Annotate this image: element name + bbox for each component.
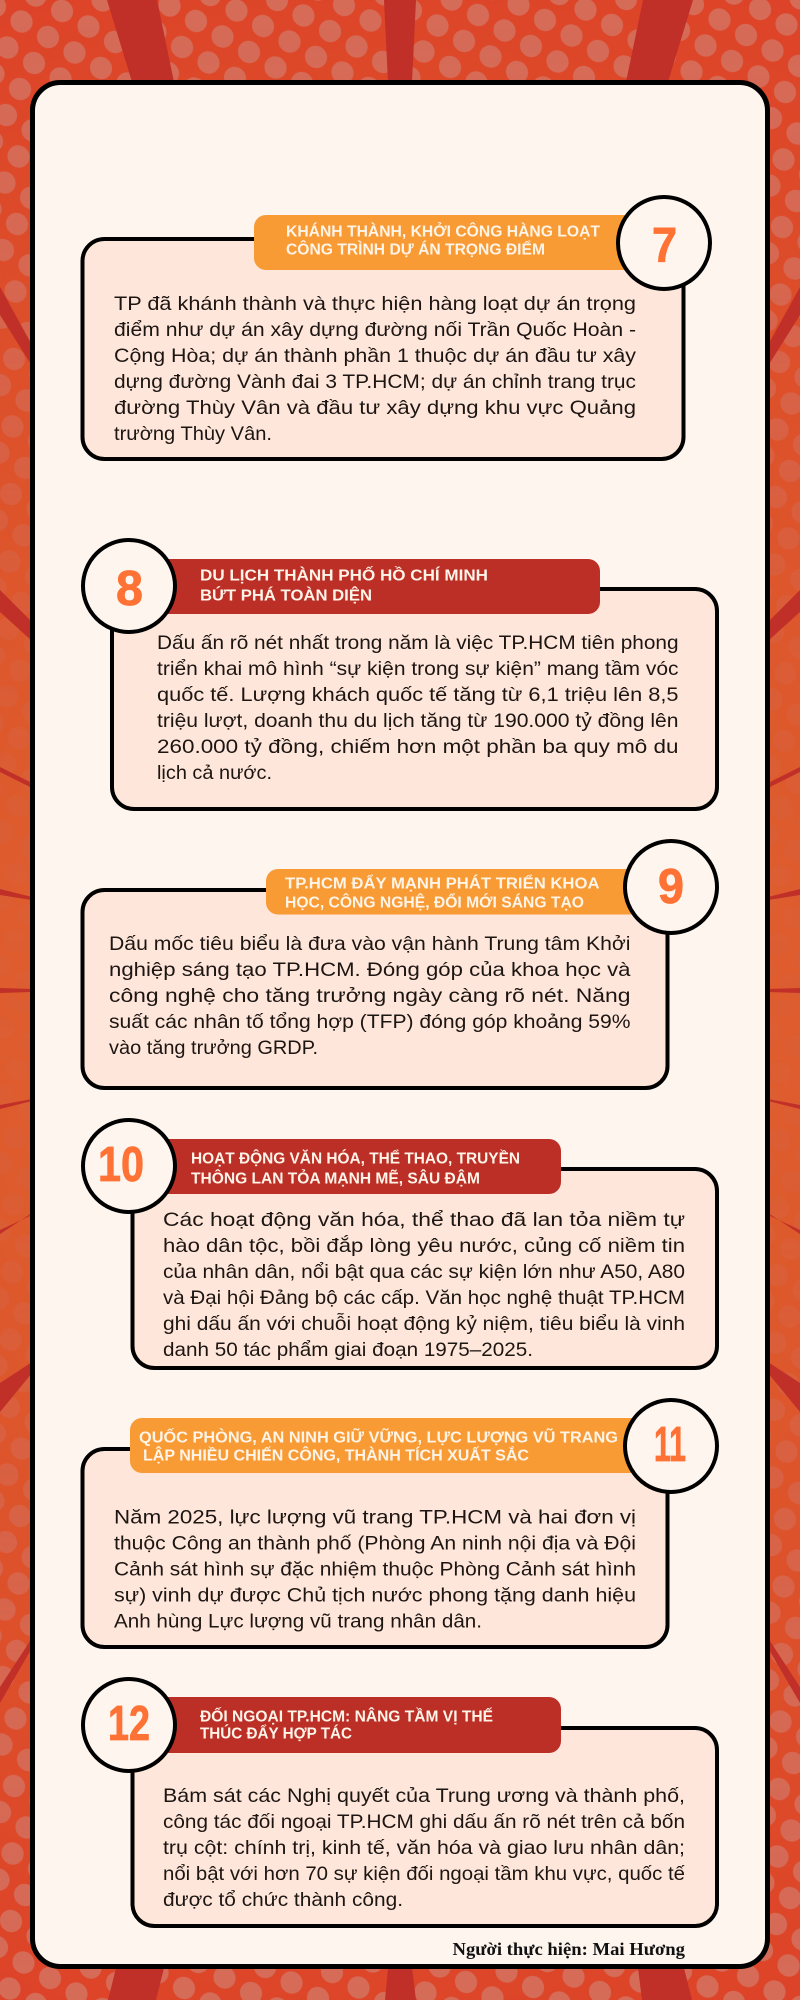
body text 9: vào tăng trưởng GRDP. bbox=[109, 1037, 318, 1059]
heading 11: QUỐC PHÒNG, AN NINH GIỮ VỮNG, LỰC LƯỢNG VŨ TRANG bbox=[139, 1428, 618, 1446]
heading 8 bbox=[200, 566, 488, 604]
number circle 7 bbox=[618, 197, 710, 289]
number circle 10 bbox=[83, 1120, 175, 1212]
heading 11: LẬP NHIỀU CHIẾN CÔNG, THÀNH TÍCH XUẤT SẮC bbox=[143, 1446, 529, 1464]
heading 7 bbox=[286, 222, 601, 258]
body box 9 bbox=[82, 890, 668, 1088]
body text 8: quốc tế. Lượng khách quốc tế tăng từ 6,1 triệu lên 8,5 bbox=[157, 684, 679, 706]
body text 10: của nhân dân, nổi bật qua các sự kiện lớn như A50, A80 bbox=[163, 1261, 685, 1283]
heading 11 bbox=[139, 1428, 618, 1464]
banner 7 bbox=[254, 215, 640, 270]
section 12 bbox=[83, 1679, 717, 1926]
body text 10: danh 50 tác phẩm giai đoạn 1975–2025. bbox=[163, 1339, 533, 1361]
banner 10 bbox=[140, 1139, 561, 1194]
body text 7: trường Thùy Vân. bbox=[114, 423, 272, 445]
number circle 11: 11 bbox=[654, 1418, 686, 1472]
number circle 9 bbox=[625, 841, 717, 933]
heading 7: KHÁNH THÀNH, KHỞI CÔNG HÀNG LOẠT bbox=[286, 222, 601, 240]
body text 12 bbox=[163, 1785, 685, 1911]
body text 8 bbox=[157, 632, 679, 784]
heading 8: BỨT PHÁ TOÀN DIỆN bbox=[200, 586, 372, 604]
body text 9: suất các nhân tố tổng hợp (TFP) đóng góp khoảng 59% bbox=[109, 1011, 630, 1033]
body text 8: Dấu ấn rõ nét nhất trong năm là việc TP.HCM tiên phong bbox=[157, 632, 678, 654]
body text 7: TP đã khánh thành và thực hiện hàng loạt dự án trọng bbox=[114, 293, 636, 315]
body text 7 bbox=[114, 293, 636, 445]
number circle 7: 7 bbox=[652, 219, 677, 273]
number circle 12 bbox=[83, 1679, 175, 1771]
banner 12 bbox=[140, 1697, 561, 1753]
section 10 bbox=[83, 1120, 717, 1368]
section 7 bbox=[82, 197, 710, 459]
body text 10: Các hoạt động văn hóa, thể thao đã lan tỏa niềm tự bbox=[163, 1209, 685, 1231]
body text 10: hào dân tộc, bồi đắp lòng yêu nước, củng cố niềm tin bbox=[163, 1234, 685, 1257]
heading 7: CÔNG TRÌNH DỰ ÁN TRỌNG ĐIỂM bbox=[286, 240, 545, 258]
number circle 12: 12 bbox=[108, 1697, 150, 1751]
body text 8: 260.000 tỷ đồng, chiếm hơn một phần ba quy mô du bbox=[157, 736, 678, 758]
body text 11: thuộc Công an thành phố (Phòng An ninh nội địa và Đội bbox=[114, 1532, 636, 1554]
banner 11 bbox=[130, 1418, 640, 1473]
body text 8: triển khai mô hình “sự kiện trong sự kiện” mang tầm vóc bbox=[157, 658, 679, 680]
section 8 bbox=[83, 540, 717, 809]
body text 7: điểm như dự án xây dựng đường nối Trần Quốc Hoàn - bbox=[114, 319, 636, 341]
number circle 8 bbox=[83, 540, 175, 632]
body text 9 bbox=[109, 933, 631, 1059]
body box 11 bbox=[82, 1449, 668, 1647]
number circle 8: 8 bbox=[116, 562, 143, 616]
body text 8: lịch cả nước. bbox=[157, 762, 272, 784]
body box 7 bbox=[82, 239, 684, 459]
heading 10: THÔNG LAN TỎA MẠNH MẼ, SÂU ĐẬM bbox=[191, 1170, 480, 1188]
body text 10 bbox=[163, 1209, 685, 1361]
body box 10 bbox=[132, 1169, 717, 1368]
number circle 10: 10 bbox=[98, 1138, 144, 1192]
body text 8: triệu lượt, doanh thu du lịch tăng từ 190.000 tỷ đồng lên bbox=[157, 710, 678, 732]
heading 10: HOẠT ĐỘNG VĂN HÓA, THỂ THAO, TRUYỀN bbox=[191, 1150, 520, 1168]
heading 12: THÚC ĐẨY HỢP TÁC bbox=[200, 1724, 352, 1742]
body text 9: công nghệ cho tăng trưởng ngày càng rõ nét. Năng bbox=[109, 985, 630, 1007]
number circle 9: 9 bbox=[658, 860, 684, 914]
body box 12 bbox=[132, 1728, 717, 1926]
number circle 11 bbox=[625, 1400, 717, 1492]
body text 12: công tác đối ngoại TP.HCM ghi dấu ấn rõ nét trên cả bốn bbox=[163, 1811, 685, 1833]
heading 8: DU LỊCH THÀNH PHỐ HỒ CHÍ MINH bbox=[200, 566, 488, 584]
heading 9: TP.HCM ĐẨY MẠNH PHÁT TRIỂN KHOA bbox=[285, 874, 600, 892]
body text 11: Anh hùng Lực lượng vũ trang nhân dân. bbox=[114, 1610, 482, 1632]
body text 9: nghiệp sáng tạo TP.HCM. Đóng góp của khoa học và bbox=[109, 959, 631, 981]
body text 10: và Đại hội Đảng bộ các cấp. Văn học nghệ thuật TP.HCM bbox=[163, 1287, 685, 1309]
heading 9 bbox=[285, 874, 600, 912]
heading 12: ĐỐI NGOẠI TP.HCM: NÂNG TẦM VỊ THẾ bbox=[200, 1708, 493, 1726]
body text 12: được tổ chức thành công. bbox=[163, 1889, 403, 1911]
body text 12: Bám sát các Nghị quyết của Trung ương và thành phố, bbox=[163, 1785, 685, 1807]
body text 9: Dấu mốc tiêu biểu là đưa vào vận hành Trung tâm Khởi bbox=[109, 933, 630, 955]
credit: Người thực hiện: Mai Hương bbox=[452, 1939, 685, 1959]
body text 11 bbox=[114, 1506, 636, 1632]
body text 7: Cộng Hòa; dự án thành phần 1 thuộc dự án đầu tư xây bbox=[114, 345, 636, 367]
heading 9: HỌC, CÔNG NGHỆ, ĐỔI MỚI SÁNG TẠO bbox=[285, 894, 584, 912]
body text 10: ghi dấu ấn với chuỗi hoạt động kỷ niệm, tiêu biểu là vinh bbox=[163, 1312, 685, 1335]
body text 11: Năm 2025, lực lượng vũ trang TP.HCM và hai đơn vị bbox=[114, 1506, 636, 1528]
body text 11: Cảnh sát hình sự đặc nhiệm thuộc Phòng Cảnh sát hình bbox=[114, 1558, 636, 1580]
body text 7: đường Thùy Vân và đầu tư xây dựng khu vực Quảng bbox=[114, 397, 636, 419]
body box 8 bbox=[112, 589, 717, 809]
heading 12 bbox=[200, 1708, 493, 1742]
banner 9 bbox=[266, 869, 640, 914]
heading 10 bbox=[191, 1150, 520, 1188]
body text 12: nổi bật với hơn 70 sự kiện đối ngoại tầm khu vực, quốc tế bbox=[163, 1863, 685, 1885]
body text 11: sự) vinh dự được Chủ tịch nước phong tặng danh hiệu bbox=[114, 1584, 636, 1606]
body text 7: dựng đường Vành đai 3 TP.HCM; dự án chỉnh trang trục bbox=[114, 371, 636, 393]
banner 8 bbox=[140, 559, 600, 614]
section 9 bbox=[82, 841, 717, 1088]
body text 12: trụ cột: chính trị, kinh tế, văn hóa và giao lưu nhân dân; bbox=[163, 1837, 685, 1859]
section 11 bbox=[82, 1400, 717, 1647]
